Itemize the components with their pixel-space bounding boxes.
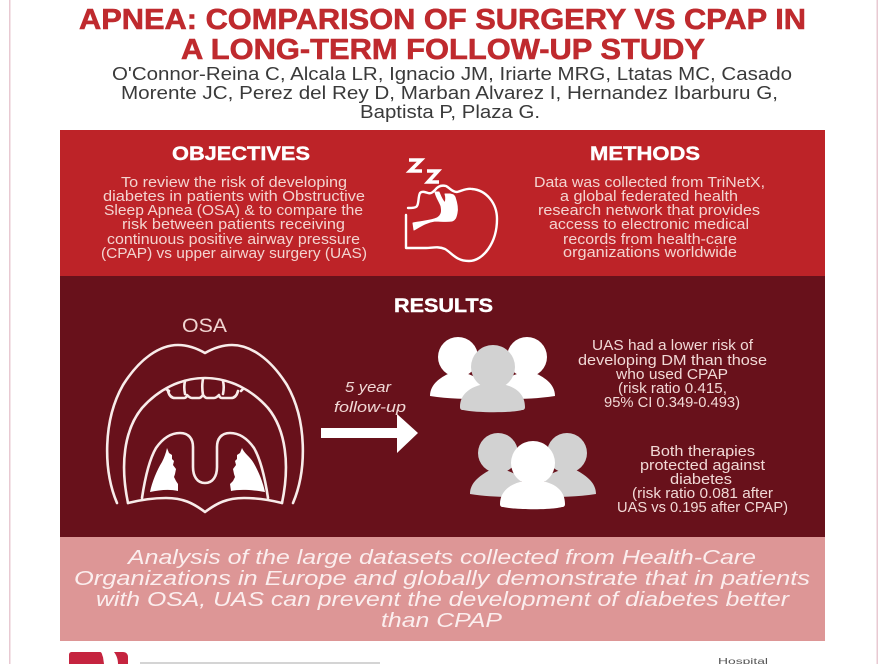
icon: open mouth	[107, 345, 303, 512]
objectives text	[101, 175, 367, 262]
icon: sleeping head	[406, 160, 497, 261]
conclusion text: Organizations in Europe and globally demonstrate that in patients	[74, 567, 810, 590]
conclusion text: than CPAP	[381, 609, 502, 632]
methods heading: METHODS	[590, 144, 700, 165]
results text 2: diabetes	[670, 472, 732, 488]
authors: Morente JC, Perez del Rey D, Marban Alvarez I, Hernandez Ibarburu G,	[121, 83, 778, 103]
objectives text: Sleep Apnea (OSA) & to compare the	[104, 203, 363, 219]
results text 1: developing DM than those	[578, 353, 767, 369]
objectives text: diabetes in patients with Obstructive	[103, 189, 365, 205]
follow-up label: 5 year	[345, 379, 392, 396]
results text 1: 95% CI 0.349-0.493)	[604, 395, 740, 411]
panel: objectives and methods	[60, 130, 825, 276]
results text 2	[617, 444, 788, 516]
results text 1: (risk ratio 0.415,	[618, 381, 727, 397]
methods text: a global federated health	[560, 189, 738, 205]
results text 2: (risk ratio 0.081 after	[632, 486, 773, 502]
icon: people group 2	[470, 433, 596, 509]
title: APNEA: COMPARISON OF SURGERY VS CPAP IN	[79, 4, 806, 36]
authors	[112, 64, 792, 122]
icon: people group 1	[430, 337, 555, 412]
methods text: Data was collected from TriNetX,	[534, 175, 765, 191]
results text 1: UAS had a lower risk of	[592, 338, 754, 354]
panel: results	[60, 276, 825, 537]
objectives text: To review the risk of developing	[121, 175, 347, 191]
arrow	[321, 414, 418, 453]
results text 2: Both therapies	[650, 444, 755, 460]
follow-up label	[334, 379, 406, 416]
authors: O'Connor-Reina C, Alcala LR, Ignacio JM, Iriarte MRG, Ltatas MC, Casado	[112, 64, 792, 84]
results heading: RESULTS	[394, 296, 493, 317]
methods text: research network that provides	[538, 203, 760, 219]
objectives text: risk between patients receiving	[122, 217, 345, 233]
results text 2: UAS vs 0.195 after CPAP)	[617, 500, 788, 516]
conclusion text: Analysis of the large datasets collected from Health-Care	[126, 546, 756, 569]
methods text: organizations worldwide	[563, 245, 737, 261]
results text 1	[578, 338, 767, 411]
follow-up label: follow-up	[334, 399, 406, 416]
results text 1: who used CPAP	[615, 367, 728, 383]
methods text: records from health-care	[563, 232, 737, 248]
footer logo left	[69, 652, 380, 664]
objectives text: (CPAP) vs upper airway surgery (UAS)	[101, 246, 367, 262]
OSA label: OSA	[182, 316, 227, 337]
conclusion text	[74, 546, 810, 632]
objectives text: continuous positive airway pressure	[107, 232, 360, 248]
title	[79, 4, 806, 66]
conclusion text: with OSA, UAS can prevent the development of diabetes better	[96, 588, 790, 611]
objectives heading: OBJECTIVES	[172, 144, 310, 165]
title: A LONG-TERM FOLLOW-UP STUDY	[181, 34, 705, 66]
results text 2: protected against	[640, 458, 765, 474]
methods text	[534, 175, 765, 261]
methods text: access to electronic medical	[549, 217, 749, 233]
authors: Baptista P, Plaza G.	[360, 102, 540, 122]
panel: conclusion	[60, 537, 825, 641]
